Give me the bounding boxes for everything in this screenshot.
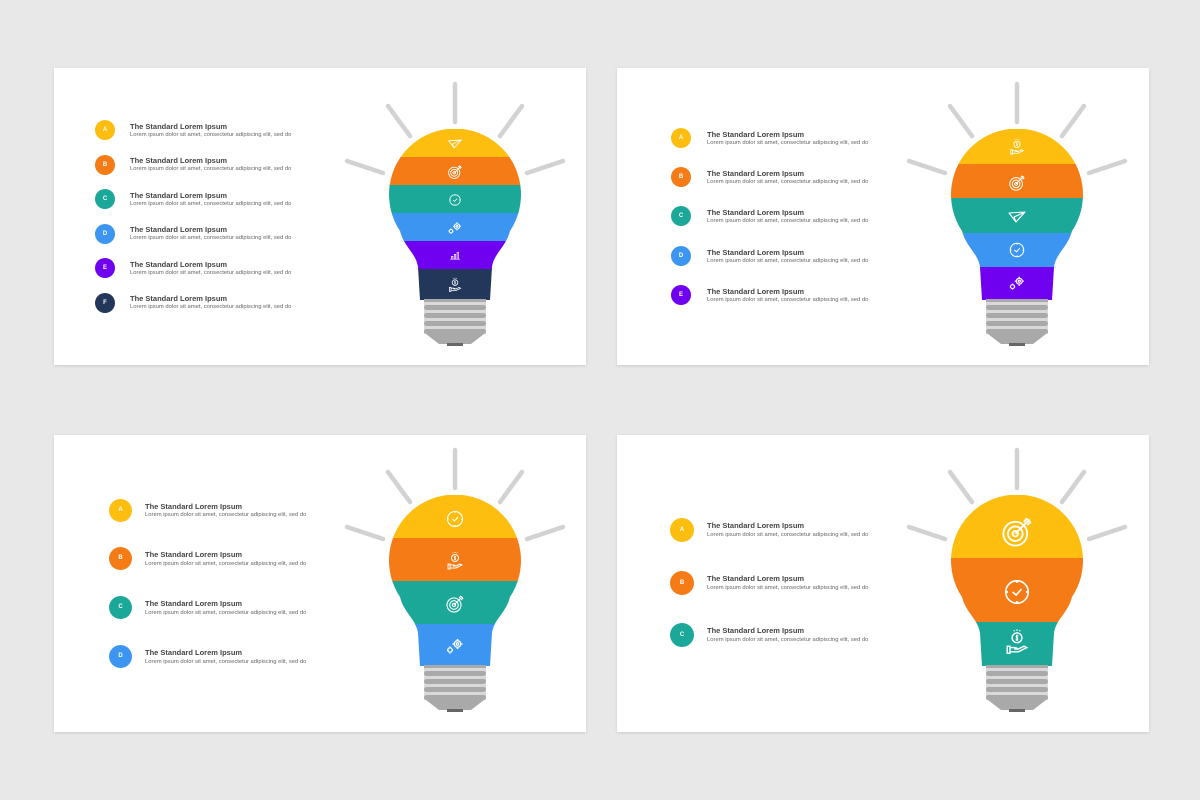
icon: target [447, 596, 463, 612]
icon: target [1010, 176, 1024, 190]
list: panel 1 items: Lorem ipsum dolor sit amet, consectetur adipiscing elit, sed do [130, 132, 291, 138]
list: panel 2 items: C [679, 213, 683, 219]
list: panel 2 items [671, 128, 868, 305]
icon: plane [449, 140, 461, 148]
bulb: panel 3 [347, 450, 563, 712]
list: panel 4 items [670, 518, 868, 647]
icon: chart [450, 252, 460, 259]
icon: gears [447, 639, 462, 654]
bulb: panel 1 [347, 84, 563, 346]
list: panel 1 items: D [103, 231, 107, 237]
icon: money [448, 552, 462, 569]
list: panel 3 items [109, 499, 306, 668]
list: panel 2 items: Lorem ipsum dolor sit amet, consectetur adipiscing elit, sed do [707, 179, 868, 185]
list: panel 1 items: A [103, 127, 107, 133]
list: panel 2 items: E [679, 292, 683, 298]
list: panel 3 items: The Standard Lorem Ipsum [145, 599, 242, 608]
list: panel 2 items: B [679, 174, 683, 180]
icon: gears [1010, 277, 1024, 290]
list: panel 3 items: C [118, 604, 123, 610]
list: panel 1 items: Lorem ipsum dolor sit amet, consectetur adipiscing elit, sed do [130, 166, 291, 172]
list: panel 2 items: The Standard Lorem Ipsum [707, 130, 804, 139]
list: panel 1 items: Lorem ipsum dolor sit amet, consectetur adipiscing elit, sed do [130, 270, 291, 276]
list: panel 4 items: Lorem ipsum dolor sit amet, consectetur adipiscing elit, sed do [707, 585, 868, 591]
list: panel 3 items: The Standard Lorem Ipsum [145, 648, 242, 657]
list: panel 2 items: Lorem ipsum dolor sit amet, consectetur adipiscing elit, sed do [707, 140, 868, 146]
list: panel 2 items: The Standard Lorem Ipsum [707, 169, 804, 178]
list: panel 3 items: The Standard Lorem Ipsum [145, 550, 242, 559]
icon: money [449, 278, 461, 291]
icon: money [1011, 139, 1023, 154]
list: panel 1 items: The Standard Lorem Ipsum [130, 122, 227, 131]
list: panel 2 items: The Standard Lorem Ipsum [707, 248, 804, 257]
list: panel 3 items: Lorem ipsum dolor sit amet, consectetur adipiscing elit, sed do [145, 512, 306, 518]
list: panel 4 items: B [680, 580, 684, 586]
list: panel 4 items: Lorem ipsum dolor sit amet, consectetur adipiscing elit, sed do [707, 532, 868, 538]
list: panel 3 items: The Standard Lorem Ipsum [145, 502, 242, 511]
icon: clock [450, 195, 460, 205]
list: panel 3 items: A [118, 507, 123, 513]
panel: three-option bulb [617, 435, 1149, 732]
list: panel 1 items: C [103, 196, 107, 202]
icon: gears [449, 222, 461, 234]
list: panel 2 items: The Standard Lorem Ipsum [707, 208, 804, 217]
list: panel 2 items: Lorem ipsum dolor sit amet, consectetur adipiscing elit, sed do [707, 258, 868, 264]
list: panel 1 items [95, 120, 292, 313]
list: panel 4 items: C [680, 632, 684, 638]
list: panel 2 items: Lorem ipsum dolor sit amet, consectetur adipiscing elit, sed do [707, 297, 868, 303]
list: panel 1 items: The Standard Lorem Ipsum [130, 260, 227, 269]
bulb: panel 4 [909, 450, 1125, 712]
list: panel 1 items: The Standard Lorem Ipsum [130, 156, 227, 165]
icon: target [449, 166, 461, 178]
list: panel 4 items: The Standard Lorem Ipsum [707, 521, 804, 530]
list: panel 2 items: D [679, 253, 683, 259]
icon: money [1007, 629, 1027, 653]
list: panel 1 items: The Standard Lorem Ipsum [130, 294, 227, 303]
list: panel 1 items: F [103, 300, 107, 306]
list: panel 1 items: B [103, 162, 107, 168]
bulb: panel 2 [909, 84, 1125, 346]
list: panel 1 items: The Standard Lorem Ipsum [130, 225, 227, 234]
icon: clock [448, 512, 462, 526]
list: panel 4 items: A [680, 527, 684, 533]
icon: plane [1009, 212, 1025, 222]
list: panel 1 items: The Standard Lorem Ipsum [130, 191, 227, 200]
panel: four-option bulb [54, 435, 586, 732]
list: panel 1 items: Lorem ipsum dolor sit amet, consectetur adipiscing elit, sed do [130, 235, 291, 241]
panel: five-option bulb [617, 68, 1149, 365]
list: panel 3 items: D [118, 653, 123, 659]
list: panel 2 items: The Standard Lorem Ipsum [707, 287, 804, 296]
icon: target [1003, 518, 1031, 546]
list: panel 2 items: A [679, 135, 683, 141]
list: panel 2 items: Lorem ipsum dolor sit amet, consectetur adipiscing elit, sed do [707, 218, 868, 224]
list: panel 3 items: B [118, 555, 123, 561]
panel: six-option bulb [54, 68, 586, 365]
list: panel 4 items: Lorem ipsum dolor sit amet, consectetur adipiscing elit, sed do [707, 637, 868, 643]
list: panel 3 items: Lorem ipsum dolor sit amet, consectetur adipiscing elit, sed do [145, 610, 306, 616]
list: panel 4 items: The Standard Lorem Ipsum [707, 574, 804, 583]
icon: clock [1010, 243, 1024, 257]
list: panel 3 items: Lorem ipsum dolor sit amet, consectetur adipiscing elit, sed do [145, 659, 306, 665]
list: panel 3 items: Lorem ipsum dolor sit amet, consectetur adipiscing elit, sed do [145, 561, 306, 567]
list: panel 4 items: The Standard Lorem Ipsum [707, 626, 804, 635]
list: panel 1 items: Lorem ipsum dolor sit amet, consectetur adipiscing elit, sed do [130, 304, 291, 310]
icon: clock [1006, 581, 1028, 603]
list: panel 1 items: Lorem ipsum dolor sit amet, consectetur adipiscing elit, sed do [130, 201, 291, 207]
list: panel 1 items: E [103, 265, 107, 271]
